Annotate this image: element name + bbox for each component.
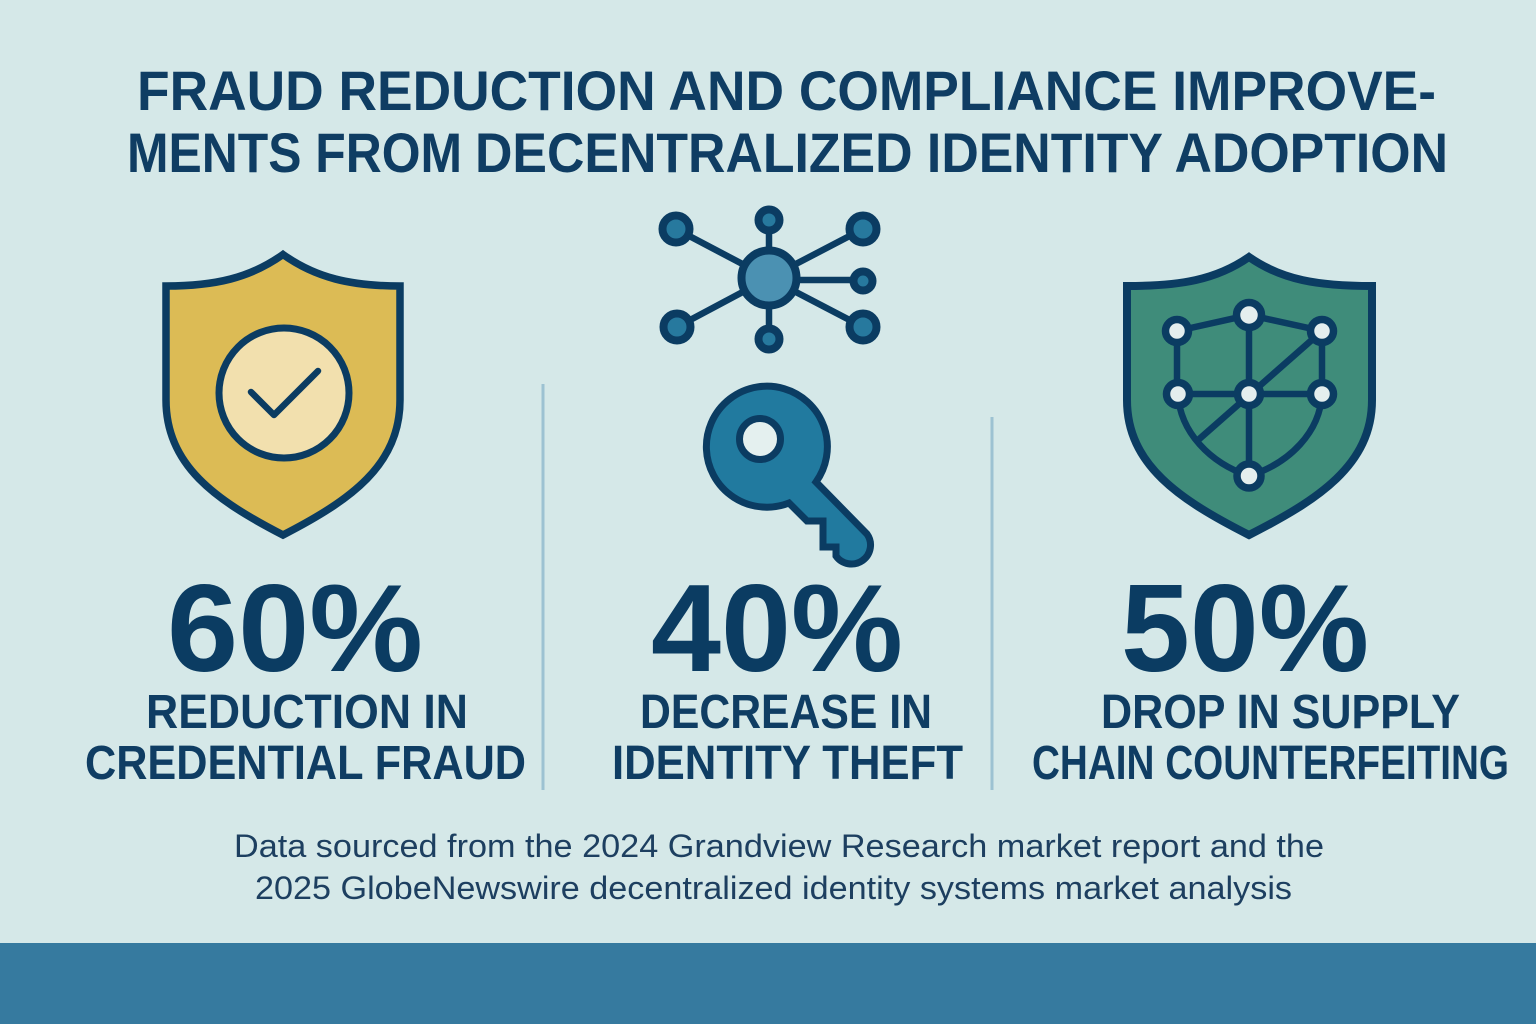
icon: gold shield with check mark (166, 254, 400, 535)
source note: Data sourced from the 2024 Grandview Research market report and the (234, 828, 1324, 864)
title: MENTS FROM (127, 121, 462, 184)
stat: 40%: 40% (651, 560, 903, 698)
title: FRAUD REDUCTION AND COMPLIANCE IMPROVE- (137, 59, 1436, 122)
divider left (542, 384, 544, 790)
title: DECENTRALIZED IDENTITY ADOPTION (475, 121, 1448, 184)
label: decrease in identity theft: IDENTITY THEFT (612, 737, 963, 790)
divider right (990, 417, 994, 790)
label: drop in supply chain counterfeiting (1032, 686, 1509, 790)
label: reduction in credential fraud: REDUCTION IN (146, 686, 468, 739)
source note (234, 828, 1324, 906)
stat: 60%: 60% (167, 560, 423, 698)
icon: key (706, 386, 871, 564)
footer bar (0, 943, 1536, 1024)
stat: 50%: 50% (1121, 560, 1369, 698)
title (127, 59, 1448, 184)
label: reduction in credential fraud: CREDENTIAL FRAUD (85, 737, 526, 790)
label: decrease in identity theft: DECREASE IN (640, 686, 932, 739)
icon: network hub (662, 210, 876, 350)
source note: 2025 GlobeNewswire decentralized identity systems market analysis (255, 870, 1292, 906)
label: decrease in identity theft (612, 686, 963, 790)
label: drop in supply chain counterfeiting: DROP IN SUPPLY (1101, 686, 1460, 739)
label: reduction in credential fraud (85, 686, 526, 790)
icon: green shield with network (1127, 257, 1372, 535)
